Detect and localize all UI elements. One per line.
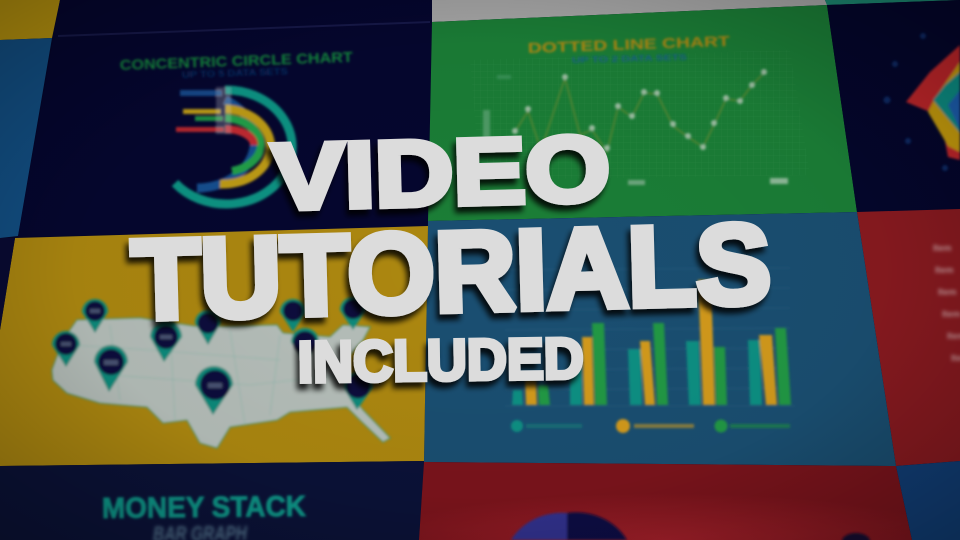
right red panel text lines: Item — [938, 287, 957, 297]
right red panel text lines: Item — [933, 243, 952, 253]
bar chart legend — [511, 419, 790, 433]
map pins — [52, 297, 373, 415]
title line: INCLUDED: INCLUDED — [297, 326, 584, 395]
money stack title: MONEY STACK — [102, 491, 306, 525]
pie chart bottom — [511, 512, 627, 540]
panel: radar chart background — [827, 0, 960, 212]
chart: radar shape — [884, 33, 960, 171]
title line: VIDEO: VIDEO — [271, 116, 611, 229]
panel: map background — [0, 226, 428, 466]
title: video tutorials included — [130, 116, 772, 395]
panel: dark left strip — [0, 238, 15, 330]
small dark shape bottom red panel — [842, 533, 870, 540]
chart: grouped bars — [505, 268, 795, 406]
panel: gold corner — [0, 0, 60, 40]
chart: concentric circles — [175, 87, 292, 204]
concentric circle chart title: CONCENTRIC CIRCLE CHART — [120, 49, 353, 74]
panel: bar chart background — [424, 212, 896, 466]
panel: blue side — [0, 38, 52, 238]
panel: dotted line chart background — [428, 5, 857, 221]
panel: top grey strip — [432, 0, 827, 22]
dotted line chart title: DOTTED LINE CHART — [528, 33, 730, 57]
title line: TUTORIALS: TUTORIALS — [130, 200, 772, 343]
chart: dotted line — [483, 69, 788, 185]
map of the United States — [52, 297, 390, 448]
panel: top right teal strip — [825, 0, 960, 5]
concentric circle chart subtitle: UP TO 5 DATA SETS — [182, 66, 288, 80]
dotted line chart subtitle: UP TO 2 DATA SETS — [572, 53, 688, 65]
panel: right red — [857, 209, 960, 466]
panel: bottom right blue — [896, 461, 960, 540]
right red panel text lines: Item — [935, 265, 954, 275]
panel: money stack background — [0, 461, 424, 540]
chart labels — [176, 90, 224, 132]
right red panel text lines — [933, 243, 960, 363]
panel: bottom red — [419, 462, 912, 540]
right red panel text lines: Item — [942, 309, 960, 319]
panel: concentric circle chart background — [18, 0, 432, 237]
